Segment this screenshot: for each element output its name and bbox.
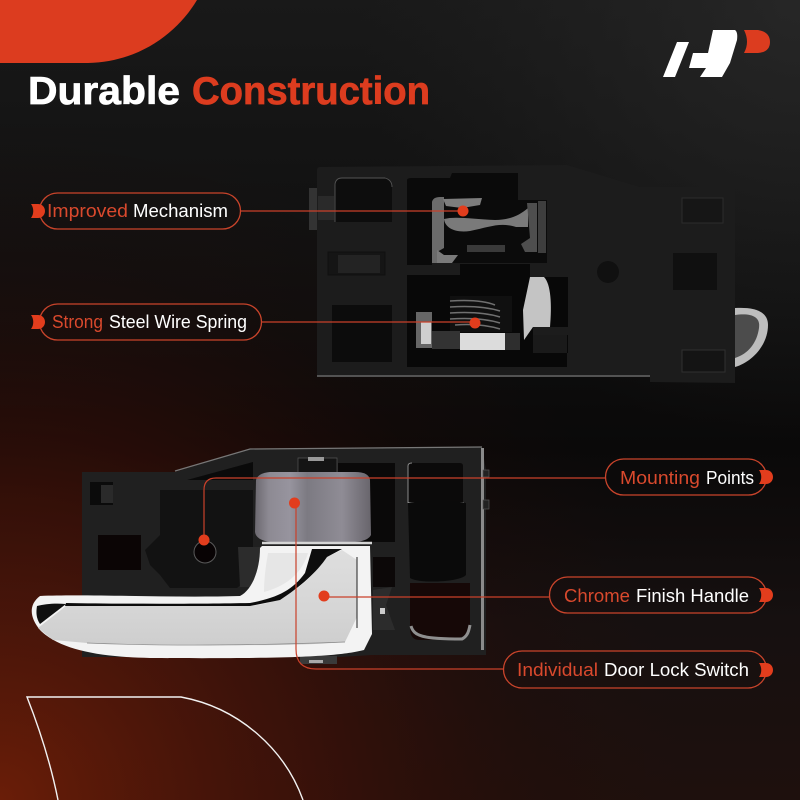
callout: Mounting Points: Points xyxy=(706,468,754,488)
callout: Chrome Finish Handle: Chrome xyxy=(564,586,630,606)
decorative corner shape top-left xyxy=(0,0,197,63)
callout: Chrome Finish Handle: Finish Handle xyxy=(636,586,749,606)
title xyxy=(28,70,430,113)
product: rear view of door handle housing xyxy=(309,165,768,383)
mechanism xyxy=(432,200,547,263)
handle reflections xyxy=(65,549,342,606)
callout: Strong Steel Wire Spring: Steel Wire Spring xyxy=(109,312,247,332)
hole and slots xyxy=(597,261,619,283)
callout: Individual Door Lock Switch xyxy=(289,498,773,688)
top-left window xyxy=(335,178,392,222)
callout: Improved Mechanism xyxy=(31,193,468,229)
callout: Mounting Points xyxy=(198,459,773,546)
callout: Chrome Finish Handle xyxy=(318,577,773,613)
callout: Strong Steel Wire Spring: Strong xyxy=(52,312,103,332)
outline shape bottom-left xyxy=(27,697,303,800)
lower mechanism bay xyxy=(407,264,568,367)
title: Construction xyxy=(192,70,430,113)
product: front view of door handle xyxy=(32,447,489,664)
logo xyxy=(663,30,770,77)
title: Durable xyxy=(28,70,180,113)
callout: Improved Mechanism: Improved xyxy=(47,201,128,221)
callout: Improved Mechanism: Mechanism xyxy=(133,201,228,221)
callout: Individual Door Lock Switch: Door Lock Switch xyxy=(604,660,749,680)
frame windows xyxy=(338,463,395,542)
callout: Strong Steel Wire Spring xyxy=(31,304,480,340)
callout: Mounting Points: Mounting xyxy=(620,468,700,488)
chrome handle xyxy=(32,546,372,658)
callout: Individual Door Lock Switch: Individual xyxy=(517,660,598,680)
chrome grey main panel xyxy=(38,550,357,645)
grey button xyxy=(255,472,371,542)
